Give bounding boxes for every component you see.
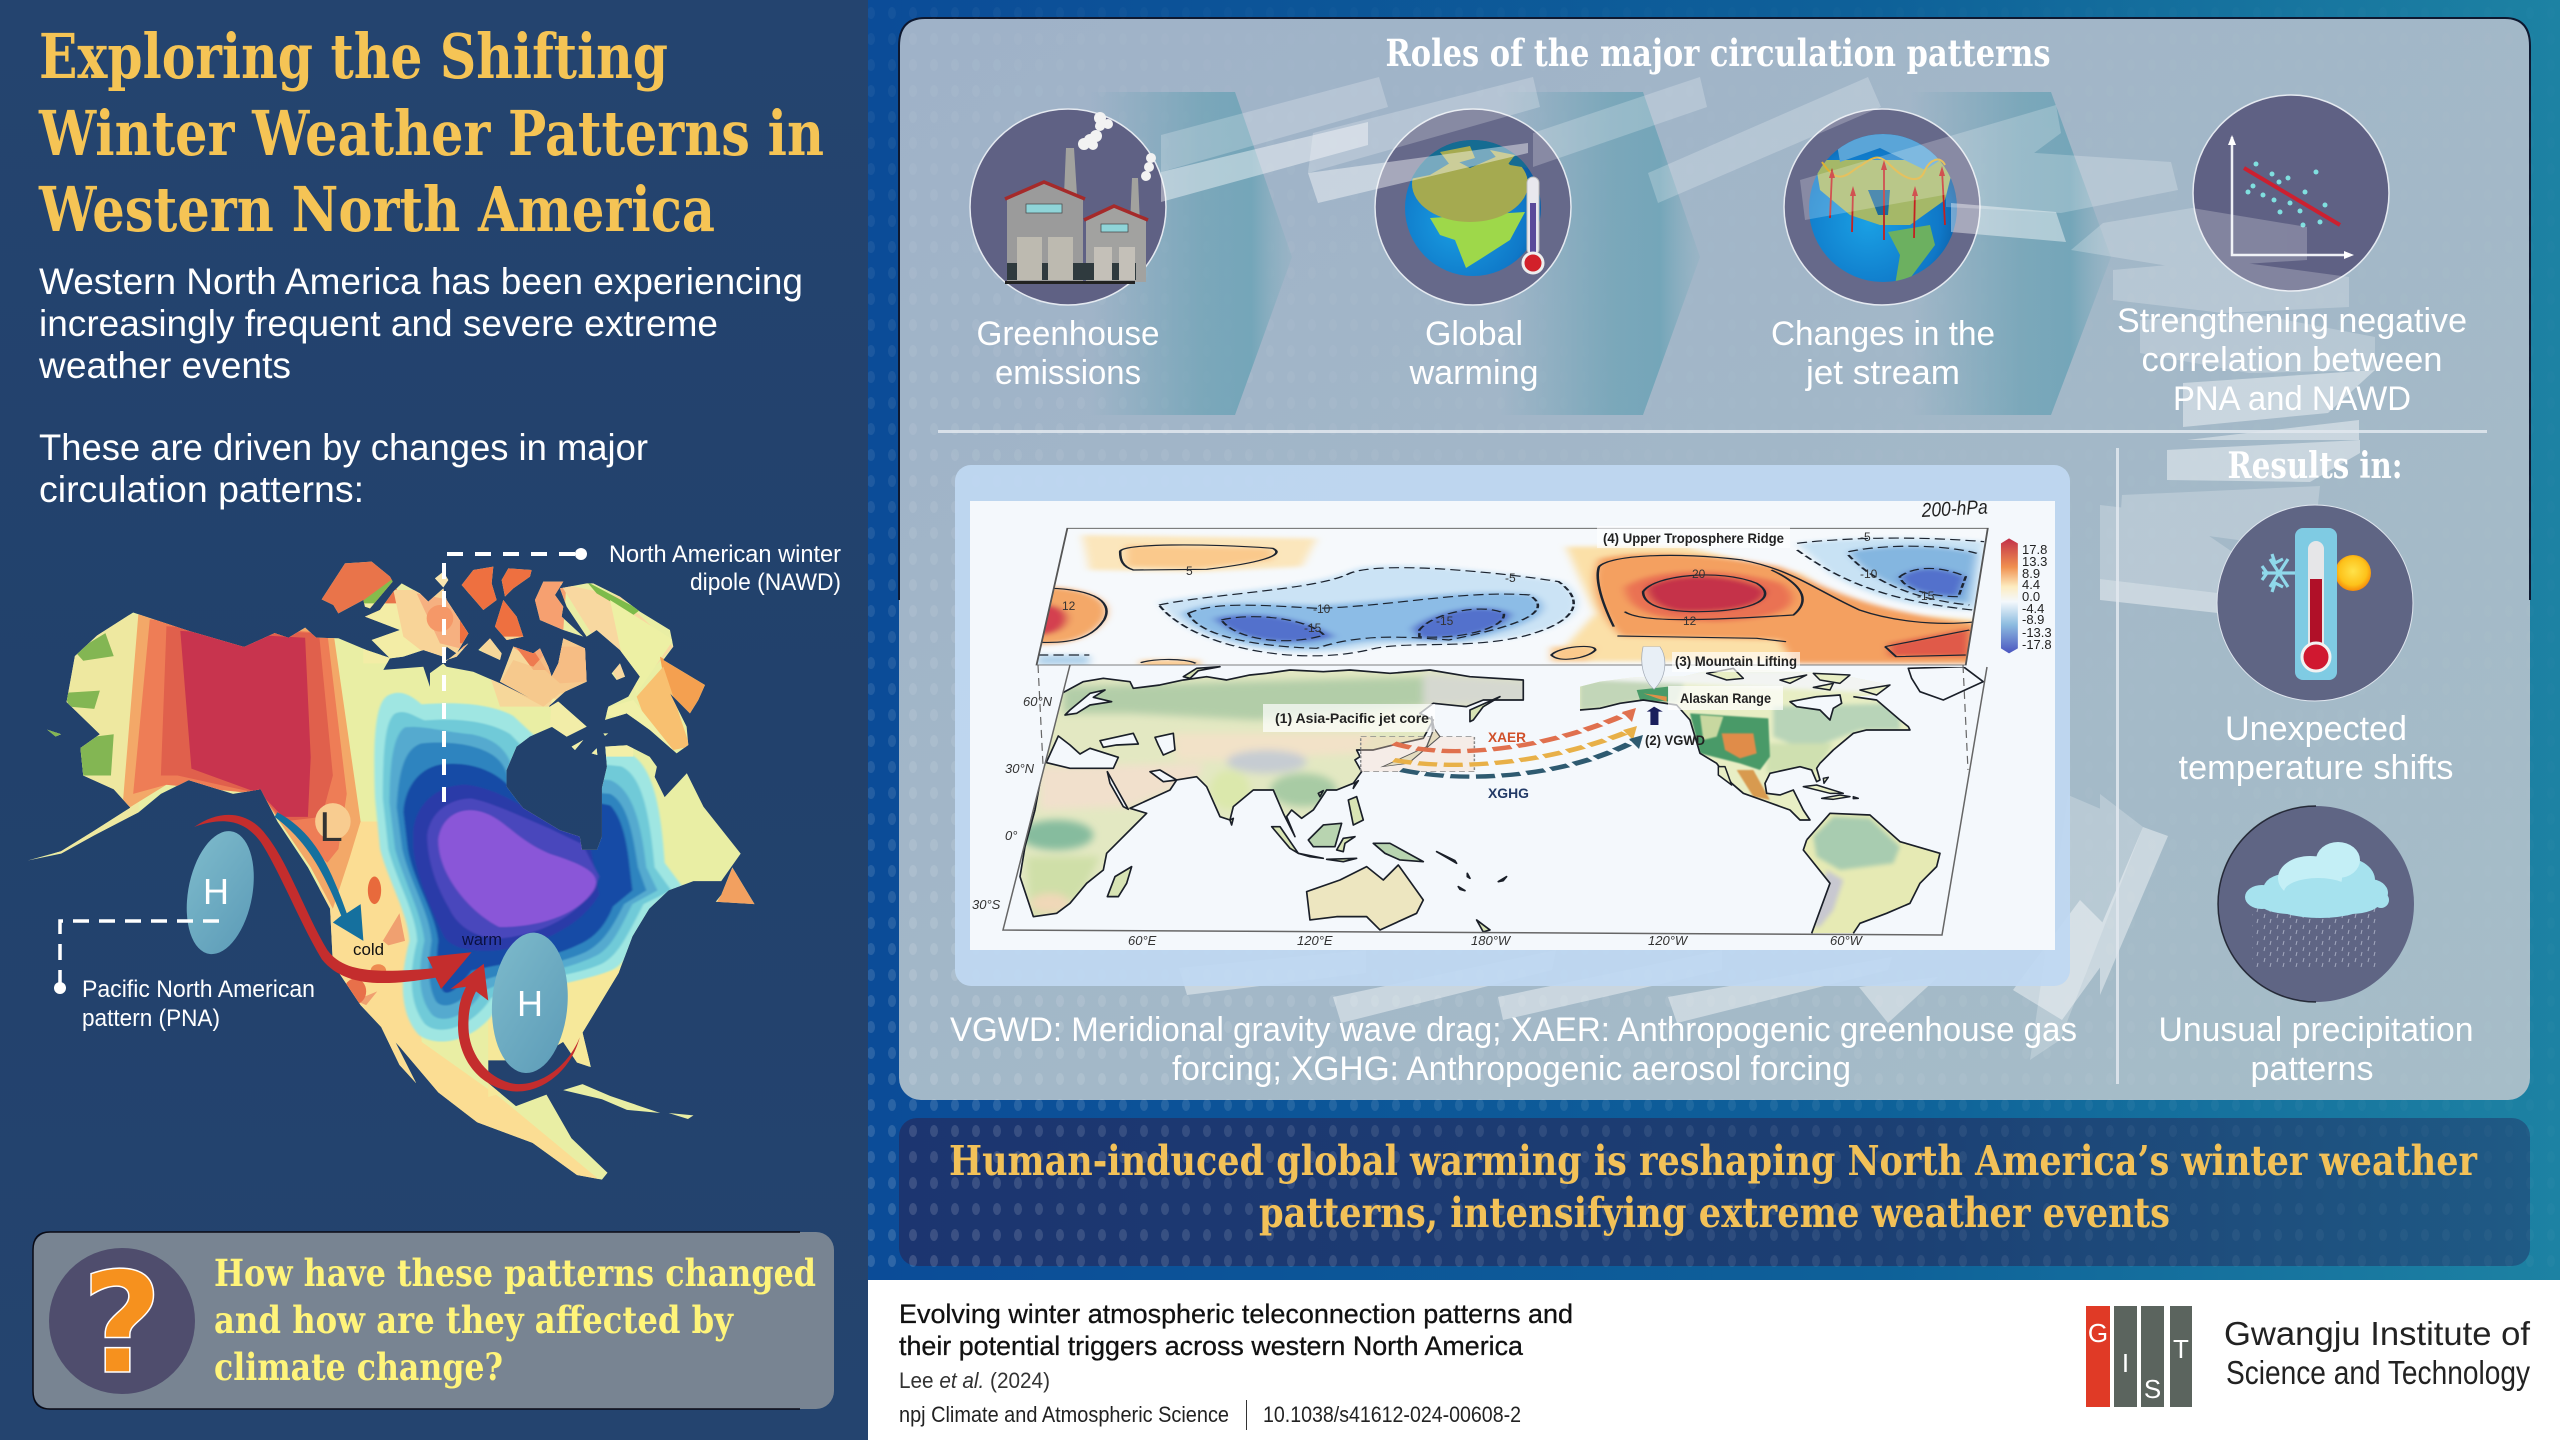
title: [38, 20, 824, 246]
figure labels: (4) Upper Troposphere Ridge: [1603, 530, 1784, 546]
figure labels: -15: [1436, 614, 1454, 628]
map labels: H: [517, 983, 543, 1024]
icon: thermometer with snowflake and sun: [2217, 505, 2413, 701]
panel: key message banner: patterns, intensifying extreme weather events: [1259, 1189, 2170, 1237]
contour bands: [374, 693, 685, 1042]
figure labels: -17.8: [2022, 637, 2052, 652]
intro text block: circulation patterns:: [39, 469, 364, 510]
icon: globe with jet stream: [1784, 109, 1980, 305]
logo: GIST: [2086, 1306, 2531, 1407]
captions: causal chain: emissions: [995, 354, 1141, 392]
figure labels: 5: [1186, 564, 1193, 578]
intro text block: Western North America has been experiencing: [39, 261, 803, 302]
logo: GIST: G: [2088, 1318, 2108, 1348]
citation text: 10.1038/s41612-024-00608-2: [1263, 1402, 1521, 1427]
Eurasia, Africa and Australasia: [1019, 666, 1524, 932]
captions: causal chain: warming: [1408, 354, 1538, 392]
Japan: [1383, 728, 1440, 767]
figure labels: 180°W: [1471, 933, 1512, 948]
NAWD leader: North American winter: [609, 541, 841, 568]
captions: causal chain: Global: [1425, 315, 1523, 353]
captions: causal chain: Strengthening negative: [2117, 302, 2467, 340]
map labels: H: [203, 871, 229, 912]
map frame lines: [1003, 665, 1987, 935]
intro text block: [38, 261, 803, 510]
title: Winter Weather Patterns in: [38, 97, 824, 170]
section heading: Roles of the major circulation patterns: [1386, 31, 2050, 75]
figure labels: 120°W: [1648, 933, 1689, 948]
figure labels: [972, 497, 2052, 948]
figure labels: 12: [1062, 599, 1076, 613]
question text: and how are they affected by: [214, 1298, 734, 1342]
figure labels: 12: [1683, 614, 1697, 628]
figure labels: 200-hPa: [1920, 497, 1988, 522]
figure labels: (1) Asia-Pacific jet core: [1275, 710, 1429, 726]
captions: causal chain: PNA and NAWD: [2173, 380, 2411, 418]
background: right side: [868, 0, 2560, 1440]
colorbar: [2001, 538, 2018, 653]
figure labels: 60°W: [1830, 933, 1864, 948]
figure labels: 60°E: [1128, 933, 1157, 948]
title: Western North America: [38, 173, 715, 246]
figure caption: VGWD: Meridional gravity wave drag; XAER: Anthropogenic greenhouse gas: [950, 1011, 2077, 1049]
map labels: cold: [353, 940, 384, 959]
panel: citation footer: [868, 1280, 2560, 1440]
figure labels: (2) VGWD: [1645, 732, 1705, 748]
figure caption: [950, 1011, 2077, 1088]
map: heat layer: [1023, 528, 2018, 777]
captions: results: patterns: [2250, 1050, 2374, 1088]
citation text: their potential triggers across western North America: [899, 1331, 1524, 1361]
intro text block: These are driven by changes in major: [39, 427, 648, 468]
figure labels: -15: [1304, 621, 1322, 635]
chart: North America temperature anomaly map: [28, 544, 841, 1180]
icon: globe with thermometer: [1375, 109, 1571, 305]
figure labels: -10: [1313, 602, 1331, 616]
title: Exploring the Shifting: [39, 20, 668, 93]
captions: results: Unexpected: [2225, 710, 2407, 748]
question text: How have these patterns changed: [214, 1251, 816, 1295]
NAWD leader: dipole (NAWD): [690, 569, 841, 596]
citation text: [899, 1299, 1573, 1430]
map labels: warm: [461, 930, 502, 949]
icon: rain cloud: [2218, 806, 2414, 1002]
figure labels: 0°: [1005, 828, 1017, 843]
panel: research question: [33, 1232, 834, 1409]
figure labels: 17.8: [2022, 542, 2047, 557]
figure labels: 20: [1692, 567, 1706, 581]
panel: left column background: [0, 0, 868, 1440]
captions: causal chain: [976, 302, 2467, 418]
Americas and Greenland: [1580, 667, 1983, 937]
figure labels: Alaskan Range: [1680, 690, 1771, 706]
arrowheads for trend arrows: [1622, 708, 1643, 749]
arctic archipelago colours: [317, 557, 707, 757]
captions: results: [2158, 710, 2474, 1088]
panel: key message banner: [899, 1118, 2530, 1266]
figure labels: 13.3: [2022, 554, 2047, 569]
citation text: Lee et al. (2024): [899, 1368, 1050, 1393]
captions: causal chain: Changes in the: [1771, 315, 1995, 353]
NAWD leader: [444, 541, 841, 802]
icon: scatter plot: [2193, 95, 2389, 291]
card: schematic figure: [955, 465, 2070, 986]
icon: factory: [970, 109, 1166, 305]
PNA leader: Pacific North American: [82, 976, 315, 1003]
question text: [214, 1251, 816, 1389]
H pressure ellipses: [178, 828, 263, 958]
jet core box: [1361, 737, 1474, 772]
captions: causal chain: Greenhouse: [976, 315, 1160, 353]
figure labels: 8.9: [2022, 566, 2040, 581]
captions: causal chain: correlation between: [2142, 341, 2442, 379]
figure labels: 30°S: [972, 897, 1001, 912]
figure labels: 60°N: [1023, 694, 1053, 709]
figure labels: XGHG: [1488, 785, 1529, 801]
figure labels: 4.4: [2022, 577, 2040, 592]
icon: question mark: ?: [81, 1243, 163, 1406]
captions: causal chain: jet stream: [1805, 354, 1960, 392]
figure labels: 120°E: [1297, 933, 1333, 948]
figure labels: -5: [1505, 571, 1516, 585]
figure labels: -15: [1917, 589, 1935, 603]
figure labels: -10: [1860, 567, 1878, 581]
mountain lifting plume: [1642, 647, 1665, 689]
figure labels: (3) Mountain Lifting: [1675, 653, 1797, 669]
intro text block: weather events: [38, 345, 291, 386]
logo: GIST: S: [2144, 1374, 2161, 1404]
chevron arrows: [1090, 92, 2111, 415]
map: world continents: [990, 650, 1983, 950]
figure labels: XAER: [1488, 729, 1526, 745]
logo: GIST: I: [2122, 1348, 2129, 1378]
logo: GIST: Gwangju Institute of: [2224, 1315, 2531, 1352]
PNA leader: pattern (PNA): [82, 1005, 220, 1032]
intro text block: increasingly frequent and severe extreme: [39, 303, 718, 344]
map labels: L: [319, 803, 343, 850]
blue jet arrow: [275, 812, 363, 941]
panel: roles of circulation patterns: [899, 18, 2530, 1100]
translucent ribbon decoration: [1161, 77, 2375, 1060]
figure labels: -13.3: [2022, 625, 2052, 640]
question text: climate change?: [214, 1345, 503, 1389]
figure labels: -4.4: [2022, 601, 2044, 616]
captions: results: temperature shifts: [2178, 749, 2454, 787]
icon: question mark: [49, 1243, 195, 1406]
map labels: [203, 803, 543, 1024]
PNA leader: [54, 921, 315, 1032]
dashed trend arrows: [1394, 713, 1638, 777]
citation text: Evolving winter atmospheric teleconnection patterns and: [899, 1299, 1573, 1329]
results heading: Results in:: [2228, 445, 2402, 487]
citation text: npj Climate and Atmospheric Science: [899, 1402, 1229, 1427]
figure labels: 0.0: [2022, 589, 2040, 604]
red jet arrow: [194, 815, 472, 989]
logo: GIST: T: [2173, 1334, 2189, 1364]
captions: results: Unusual precipitation: [2158, 1011, 2474, 1049]
figure labels: -5: [1860, 530, 1871, 544]
figure caption: forcing; XGHG: Anthropogenic aerosol forcing: [1172, 1050, 1851, 1088]
figure labels: -8.9: [2022, 612, 2044, 627]
figure labels: 30°N: [1005, 761, 1035, 776]
